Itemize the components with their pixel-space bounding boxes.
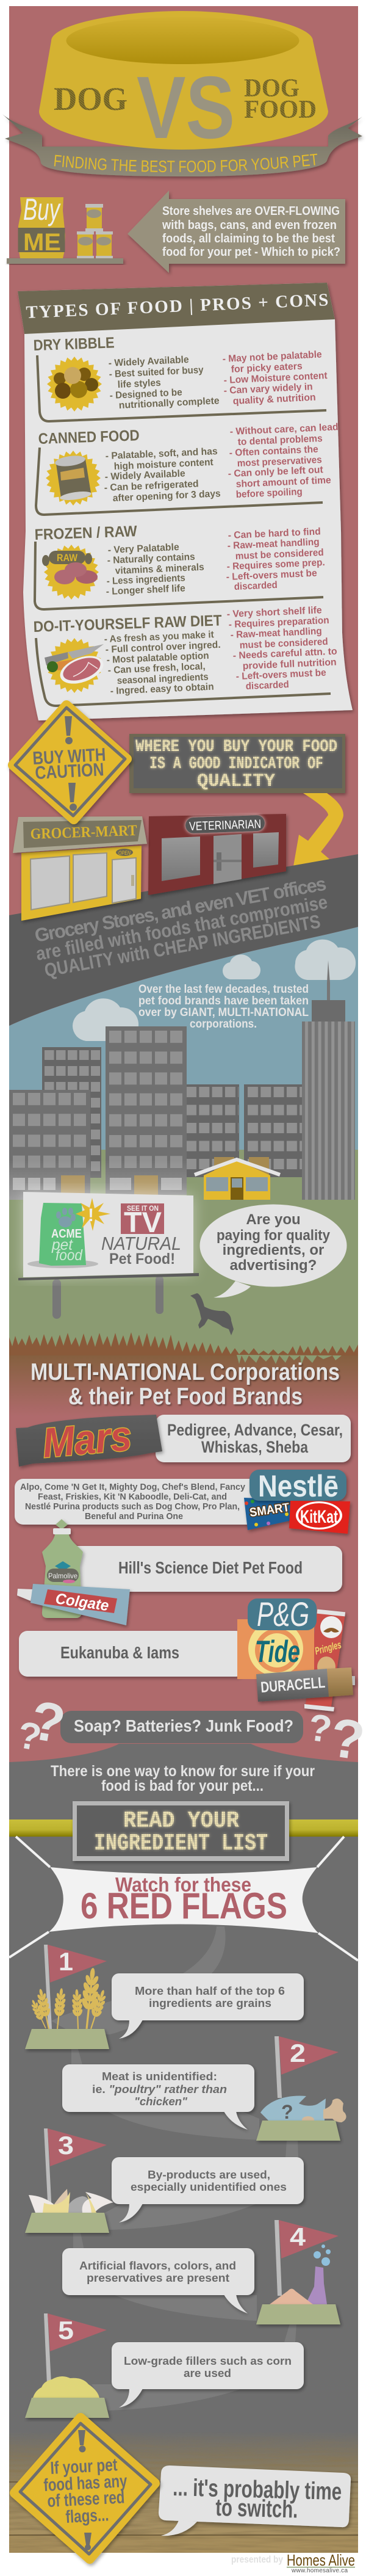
LED sign: where you buy: WHERE YOU BUY YOUR FOOD bbox=[135, 738, 337, 756]
cons list: - May not be palatable bbox=[222, 349, 322, 365]
icon: fresh ingredients bbox=[45, 638, 107, 693]
section: do-it-yourself raw diet: DO-IT-YOURSELF RAW DIET bbox=[33, 612, 222, 636]
final caution sign: If your pet bbox=[50, 2455, 118, 2478]
caution sign bbox=[13, 705, 127, 819]
cons list: - Left-overs must be bbox=[235, 668, 326, 682]
icon: smarties box: SMART bbox=[249, 1501, 290, 1520]
question marks: ? bbox=[306, 1707, 334, 1751]
flag 5: low-grade fillers: 5 bbox=[58, 2316, 74, 2345]
subtitle on ribbon: FINDING THE BEST FOOD FOR YOUR PET bbox=[54, 154, 317, 172]
clouds bbox=[73, 940, 356, 1041]
grey band with text: Grocery Stores, and even VET offices bbox=[33, 873, 328, 946]
icon: dog silhouette bbox=[190, 1293, 234, 1335]
pros list: - Ingred. easy to obtain bbox=[110, 682, 214, 697]
cons list: to dental problems bbox=[237, 434, 323, 448]
final caution sign: food has any bbox=[43, 2472, 127, 2495]
icon: food bag: Buy bbox=[23, 192, 61, 227]
billboard bbox=[18, 1192, 199, 1319]
final caution sign: flags... bbox=[65, 2505, 109, 2527]
final caution sign bbox=[15, 2418, 155, 2559]
section: canned food: CANNED FOOD bbox=[38, 427, 140, 448]
pros list: - As fresh as you make it bbox=[104, 629, 215, 645]
connecting path bbox=[51, 1926, 298, 2411]
icon: nestle logo: Nestlē bbox=[258, 1469, 339, 1503]
pros list: after opening for 3 days bbox=[112, 488, 221, 504]
icon: raw sausage: RAW bbox=[57, 552, 78, 564]
pros list: - Most palatable option bbox=[106, 651, 209, 666]
grocery store bbox=[13, 816, 147, 921]
speech bubble: quality or advertising bbox=[200, 1204, 346, 1297]
LED sign: read your ingredient list: INGREDIENT LIST bbox=[94, 1830, 268, 1857]
brown soil fade bbox=[9, 1355, 358, 1417]
grey lower section bbox=[9, 1744, 358, 2431]
flag 4: artificial additives bbox=[62, 2220, 340, 2324]
flag 5: low-grade fillers bbox=[25, 2313, 304, 2418]
arrow callout: store shelves: foods, all claiming to be the best bbox=[162, 232, 335, 245]
LED sign: where you buy bbox=[129, 734, 345, 793]
section: frozen raw: FROZEN / RAW bbox=[34, 523, 137, 543]
pros list bbox=[104, 446, 221, 504]
grocery store: GROCER-MART bbox=[30, 822, 137, 843]
cons list: - Low Moisture content bbox=[223, 371, 328, 386]
arrow callout: store shelves: food for your pet - Which to pick? bbox=[162, 245, 340, 259]
dog bowl title bbox=[39, 11, 328, 157]
final speech bubble bbox=[159, 2465, 351, 2536]
brand row: eukanuba bbox=[19, 1595, 355, 1711]
speech bubble: ingredients are grains bbox=[149, 1997, 271, 2009]
caution sign: CAUTION bbox=[35, 760, 104, 783]
speech bubble: Meat is unidentified: bbox=[102, 2070, 217, 2083]
cons list: most preservatives bbox=[237, 455, 322, 469]
LED sign: read your ingredient list: READ YOUR bbox=[123, 1808, 239, 1834]
wood floor bbox=[9, 2431, 358, 2553]
question marks: ? bbox=[15, 1714, 45, 1759]
skyscraper bbox=[302, 960, 355, 1200]
speech bubble: Artificial flavors, colors, and bbox=[79, 2260, 236, 2272]
pros list: - Can use fresh, local, bbox=[107, 661, 206, 676]
flag 1: grains: 1 bbox=[59, 1947, 73, 1976]
cons list: discarded bbox=[234, 580, 278, 592]
heading: multi-national corporations bbox=[30, 1359, 340, 1410]
LED sign: where you buy: QUALITY bbox=[197, 771, 275, 792]
building bbox=[42, 1047, 101, 1178]
speech bubble bbox=[112, 2342, 304, 2407]
banner: 6 red flags: Watch for these bbox=[115, 1873, 251, 1896]
icon: pringles can bbox=[304, 1609, 345, 1711]
heading: types of food: TYPES OF FOOD | PROS + CONS bbox=[26, 290, 329, 322]
flag 3: by-products: 3 bbox=[58, 2131, 74, 2160]
section: dry kibble bbox=[33, 334, 328, 421]
speech bubble: "chicken" bbox=[134, 2095, 187, 2108]
icon: mars wrapper: Mars bbox=[41, 1413, 134, 1467]
icon: by-products pile bbox=[29, 2189, 113, 2213]
icon: mystery meat: ? bbox=[281, 2101, 293, 2123]
speech bubble bbox=[62, 2064, 254, 2130]
icon: food bag: ME bbox=[23, 229, 61, 256]
sky text: Over the last few decades, trusted bbox=[138, 983, 309, 996]
building bbox=[244, 1084, 302, 1177]
flag 2: unidentified meat: 2 bbox=[290, 2039, 306, 2067]
cons list: for picky eaters bbox=[231, 361, 303, 375]
icon: palmolive bottle bbox=[42, 1519, 83, 1618]
cons list: must be considered bbox=[239, 637, 328, 651]
speech bubble: quality or advertising: advertising? bbox=[230, 1257, 317, 1274]
pros list: vitamins & minerals bbox=[115, 562, 204, 576]
cons list: before spoiling bbox=[235, 487, 303, 500]
arrow callout: store shelves bbox=[127, 190, 345, 273]
cons list: - Often contains the bbox=[229, 444, 318, 459]
cons list: - Needs careful attn. to bbox=[232, 647, 337, 661]
section: frozen raw bbox=[34, 523, 325, 609]
billboard: NATURAL bbox=[101, 1233, 181, 1254]
pros list: - Best suited for busy bbox=[109, 365, 204, 380]
caution sign: BUY WITH bbox=[32, 745, 106, 769]
icon: acme bag bbox=[27, 1203, 98, 1268]
ribbon banner bbox=[2, 114, 362, 176]
building bbox=[106, 1026, 187, 1195]
sky text bbox=[138, 983, 309, 1031]
open sign bbox=[116, 849, 133, 856]
icon: acme bag: ACME bbox=[51, 1227, 82, 1241]
icon: palmolive bottle: Palmolive bbox=[48, 1572, 77, 1580]
cons list: quality & nutrition bbox=[232, 393, 316, 407]
speech bubble: More than half of the top 6 bbox=[135, 1985, 285, 1997]
soap batteries question bar: Soap? Batteries? Junk Food? bbox=[74, 1716, 293, 1735]
sky bbox=[9, 927, 358, 1150]
icon: kit kat bbox=[289, 1501, 350, 1534]
brand row: nestle: Beneful and Purina One bbox=[85, 1511, 183, 1522]
pros list bbox=[108, 355, 220, 411]
vet clinic bbox=[148, 814, 286, 895]
cons list bbox=[228, 422, 339, 500]
icon: smarties box bbox=[244, 1498, 292, 1530]
brand row: nestle: Alpo, Come 'N Get It, Mighty Dog, Chef's Blend, Fancy bbox=[20, 1482, 246, 1492]
grey band with text: QUALITY with CHEAP INGREDIENTS bbox=[43, 910, 322, 981]
panel: types of food paper bbox=[18, 283, 353, 720]
icon: wheat bbox=[28, 1967, 109, 2031]
cons list: - Raw-meat handling bbox=[227, 537, 320, 551]
speech bubble: preservatives are present bbox=[87, 2272, 229, 2284]
brand row: hills: Hill's Science Diet Pet Food bbox=[118, 1558, 303, 1577]
olive bar bbox=[9, 1820, 358, 1837]
icon: food bag bbox=[18, 192, 65, 258]
pros list: - Palatable, soft, and has bbox=[105, 446, 218, 462]
soap batteries question bar bbox=[60, 1711, 303, 1743]
pros list: - Very Palatable bbox=[107, 542, 179, 556]
pros list: - Less ingredients bbox=[106, 573, 185, 587]
cons list: discarded bbox=[245, 680, 289, 692]
speech bubble: Low-grade fillers such as corn bbox=[124, 2355, 292, 2367]
speech bubble bbox=[112, 1973, 304, 2039]
question marks: ? bbox=[26, 1689, 70, 1755]
cons list: provide full nutrition bbox=[242, 657, 337, 672]
grey band with text bbox=[9, 854, 358, 1026]
icon: star burst: ! bbox=[88, 1205, 94, 1225]
text: one way to know: food is bad for your pet... bbox=[101, 1777, 264, 1794]
pros list: - Full control over ingred. bbox=[105, 640, 221, 655]
building bbox=[186, 1084, 239, 1177]
pros list: - Can be refrigerated bbox=[104, 479, 199, 493]
brand row: nestle: Feast, Friskies, Kit 'N Kaboodle, Deli-Cat, and bbox=[38, 1492, 227, 1502]
footer: presented by homes alive bbox=[231, 2551, 355, 2574]
question marks bbox=[15, 1689, 366, 1772]
pros list: - Naturally contains bbox=[107, 552, 195, 566]
pros list bbox=[104, 629, 221, 697]
icon: colgate tube: Colgate bbox=[54, 1590, 110, 1614]
pros list: - Widely Available bbox=[104, 468, 185, 482]
grass bbox=[9, 1332, 358, 1355]
icon: tide box: Tide bbox=[255, 1634, 300, 1669]
open sign: OPEN bbox=[118, 850, 131, 856]
pros list bbox=[106, 542, 204, 597]
dog bowl title: DOG bbox=[54, 81, 127, 117]
house bbox=[195, 1159, 280, 1200]
icon: can bbox=[46, 451, 101, 506]
icon: tide box bbox=[237, 1619, 314, 1679]
LED sign: read your ingredient list bbox=[73, 1801, 289, 1861]
cons list: - Can vary widely in bbox=[223, 382, 313, 396]
icon: raw sausage bbox=[42, 545, 99, 600]
grey band with text: are filled with foods that compromise bbox=[34, 891, 329, 965]
icon: p and g logo: P&G bbox=[257, 1595, 309, 1633]
section: do-it-yourself raw diet bbox=[33, 605, 337, 706]
vet sign: VETERINARIAN bbox=[189, 818, 261, 833]
cons list: - Can only be left out bbox=[228, 465, 324, 479]
brand row: mars bbox=[16, 1413, 351, 1467]
flag 3: by-products bbox=[25, 2128, 304, 2233]
icon: corn filler pile bbox=[33, 2376, 99, 2398]
flag 2: unidentified meat bbox=[62, 2036, 346, 2141]
icon: duracell battery: DURACELL bbox=[260, 1674, 326, 1696]
icon: acme bag: pet bbox=[51, 1236, 73, 1254]
icon: star burst bbox=[76, 1198, 110, 1231]
speech bubble: quality or advertising: paying for quality bbox=[217, 1227, 331, 1244]
speech bubble: By-products are used, bbox=[148, 2169, 270, 2181]
pros list: life styles bbox=[117, 378, 161, 390]
cons list: - Requires preparation bbox=[228, 615, 329, 630]
pros list: seasonal ingredients bbox=[117, 672, 209, 686]
arrow: pointing down to stores bbox=[292, 793, 343, 873]
dog bowl title: DOG bbox=[244, 74, 300, 103]
section: dry kibble: DRY KIBBLE bbox=[33, 334, 115, 354]
dog bowl title: FOOD bbox=[244, 96, 317, 124]
icon: acme bag: food bbox=[56, 1247, 83, 1264]
icon: chemicals bbox=[270, 2244, 331, 2304]
arrow callout: store shelves: Store shelves are OVER-FLOWING bbox=[162, 205, 340, 218]
pet food shelf bbox=[7, 192, 123, 264]
brand row: nestle: Nestlé Purina products such as Dog Chow, Pro Plan, bbox=[25, 1501, 240, 1512]
icon: kit kat: KitKat bbox=[300, 1507, 338, 1527]
speech bubble: are used bbox=[184, 2367, 231, 2379]
sky text: over by GIANT, MULTI-NATIONAL bbox=[138, 1006, 309, 1019]
icon: stacked cans bbox=[77, 204, 113, 258]
cons list bbox=[226, 526, 325, 592]
icon: duracell battery bbox=[256, 1667, 355, 1702]
see it on tv badge: SEE IT ON bbox=[127, 1204, 159, 1213]
speech bubble: quality or advertising: ingredients, or bbox=[223, 1242, 324, 1258]
section: canned food bbox=[36, 422, 339, 515]
speech bubble bbox=[112, 2157, 304, 2222]
speech bubble: ie. "poultry" rather than bbox=[92, 2083, 227, 2095]
brand row: mars: Whiskas, Sheba bbox=[201, 1438, 309, 1456]
cons list bbox=[226, 605, 337, 692]
icon: kibble bbox=[47, 357, 102, 412]
flag 1: grains bbox=[25, 1945, 304, 2049]
banner: 6 red flags: 6 RED FLAGS bbox=[81, 1885, 287, 1926]
text: one way to know bbox=[51, 1763, 315, 1794]
text: one way to know: There is one way to know for sure if your bbox=[51, 1763, 315, 1780]
cons list: - Can be hard to find bbox=[228, 526, 321, 541]
cons list: - Requires some prep. bbox=[226, 557, 325, 572]
heading: multi-national corporations: & their Pet Food Brands bbox=[68, 1384, 303, 1410]
brand row: hills bbox=[17, 1519, 342, 1625]
cons list: - Very short shelf life bbox=[226, 605, 322, 620]
speech bubble bbox=[62, 2248, 254, 2313]
icon: colgate tube bbox=[17, 1584, 130, 1625]
icon: pringles can: Pringles bbox=[314, 1639, 343, 1657]
banner: 6 red flags bbox=[9, 1837, 358, 1961]
cons list: short amount of time bbox=[235, 475, 331, 490]
speech bubble: quality or advertising: Are you bbox=[246, 1211, 301, 1228]
icon: mars wrapper bbox=[16, 1413, 162, 1467]
ground bbox=[9, 1150, 358, 1355]
pros list: high moisture content bbox=[113, 457, 214, 472]
building bbox=[9, 1090, 90, 1200]
cons list: must be considered bbox=[235, 548, 324, 562]
final caution sign: of these red bbox=[47, 2487, 125, 2511]
cons list: - Raw-meat handling bbox=[230, 626, 322, 640]
final speech bubble: to switch. bbox=[215, 2494, 298, 2523]
arrow callout: store shelves: with bags, cans, and even frozen bbox=[162, 219, 337, 232]
sky text: corporations. bbox=[190, 1018, 257, 1031]
billboard: Pet Food! bbox=[109, 1250, 175, 1268]
cons list bbox=[222, 349, 328, 407]
pros list: - Designed to be bbox=[109, 387, 182, 401]
sky text: pet food brands have been taken bbox=[138, 995, 309, 1007]
dog bowl title: VS bbox=[137, 58, 235, 157]
pros list: - Longer shelf life bbox=[106, 583, 185, 597]
cons list: - Left-overs must be bbox=[226, 568, 317, 582]
flag 4: artificial additives: 4 bbox=[290, 2222, 306, 2251]
brand row: nestle bbox=[15, 1469, 350, 1534]
brand row: eukanuba: Eukanuba & Iams bbox=[60, 1643, 179, 1662]
cons list: - Without care, can lead bbox=[229, 422, 339, 437]
pros list: nutritionally complete bbox=[118, 396, 220, 411]
see it on tv badge: TV bbox=[124, 1206, 162, 1238]
pros list: - Widely Available bbox=[108, 355, 189, 369]
icon: mystery meat bbox=[260, 2095, 346, 2124]
city buildings bbox=[9, 960, 355, 1200]
footer: presented by homes alive: presented by bbox=[231, 2555, 283, 2565]
speech bubble: especially unidentified ones bbox=[131, 2181, 287, 2193]
footer: presented by homes alive: www.homesalive.ca bbox=[291, 2567, 348, 2574]
